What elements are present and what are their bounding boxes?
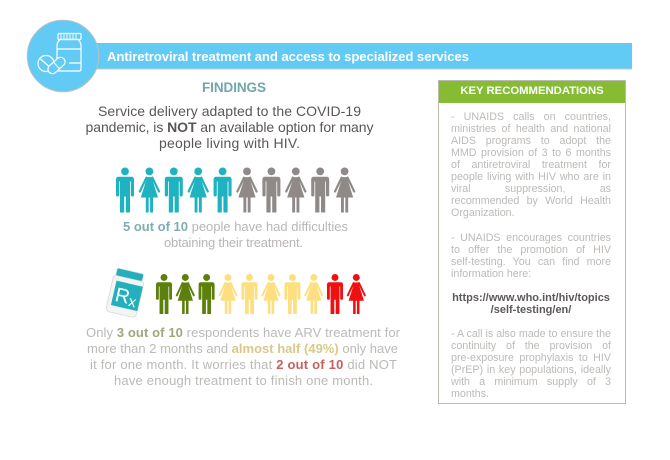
recommendation: PrEP continuity <box>451 328 611 400</box>
icon: medicine bottle and pills <box>27 20 99 92</box>
recommendation: HIV self-testing: to offer the promotion of HIV <box>451 244 611 256</box>
icon: Rx bottle: x <box>127 293 138 312</box>
recommendation: HIV self-testing: - UNAIDS encourages countries <box>451 232 611 244</box>
caption: ARV treatment duration: it for one month. It worries that 2 out of 10 did NOT <box>90 357 397 372</box>
link: WHO self-testing page: /self-testing/en/ <box>491 304 571 316</box>
title banner <box>90 43 632 70</box>
caption: 5 out of 10: obtaining their treatment. <box>164 235 303 250</box>
recommendation: multi-month dispensing: ministries of health and national <box>451 123 611 135</box>
recommendation: multi-month dispensing: - UNAIDS calls on countries, <box>451 111 611 123</box>
panel heading <box>439 81 625 103</box>
pictogram: treatment duration of 10 people <box>156 274 365 314</box>
caption: ARV treatment duration: have enough treatment to finish one month. <box>114 373 373 388</box>
recommendation: multi-month dispensing: Organization. <box>451 207 515 219</box>
panel: key recommendations <box>438 80 626 404</box>
icon: Rx bottle: R <box>113 284 132 309</box>
recommendation: HIV self-testing: information here: <box>451 268 531 280</box>
intro statement: people living with HIV. <box>159 135 300 151</box>
recommendation: PrEP continuity: continuity of the provision of <box>451 340 611 352</box>
recommendation: PrEP continuity: with a minimum supply of 3 <box>451 376 611 388</box>
intro statement: pandemic, is NOT an available option for many <box>86 119 374 135</box>
recommendation: multi-month dispensing: recommended by World Health <box>451 195 611 207</box>
recommendation: multi-month dispensing: viral suppression, as <box>451 183 611 195</box>
icon: Rx bottle <box>105 268 146 318</box>
heading: findings: FINDINGS <box>202 80 266 95</box>
caption: ARV treatment duration: more than 2 months and almost half (49%) only have <box>87 341 398 356</box>
recommendation: multi-month dispensing: people living with HIV who are in <box>451 171 611 183</box>
intro statement: Service delivery adapted to the COVID-19 <box>98 103 361 119</box>
caption: 5 out of 10: 5 out of 10 people have had difficulties <box>123 219 348 234</box>
recommendation: multi-month dispensing: of antiretroviral treatment for <box>451 159 611 171</box>
banner title text: Antiretroviral treatment and access to specialized services <box>107 49 469 64</box>
recommendation: multi-month dispensing <box>451 111 611 219</box>
intro statement <box>86 103 374 151</box>
recommendation: PrEP continuity: - A call is also made to ensure the <box>451 328 611 340</box>
pictogram: 5 of 10 people <box>116 168 354 212</box>
recommendation: PrEP continuity: months. <box>451 388 489 400</box>
recommendation: PrEP continuity: (PrEP) in key populations, ideally <box>451 364 611 376</box>
caption: ARV treatment duration: Only 3 out of 10 respondents have ARV treatment for <box>86 325 401 340</box>
link: WHO self-testing page: https://www.who.int/hiv/topics <box>452 292 610 304</box>
link: WHO self-testing page <box>452 292 610 316</box>
recommendation: multi-month dispensing: AIDS programs to adopt the <box>451 135 611 147</box>
recommendation: multi-month dispensing: MMD provision of 3 to 6 months <box>451 147 611 159</box>
recommendation: PrEP continuity: pre-exposure prophylaxis to HIV <box>451 352 611 364</box>
recommendation: HIV self-testing <box>451 232 611 280</box>
recommendation: HIV self-testing: self-testing. You can find more <box>451 256 611 268</box>
panel heading: KEY RECOMMENDATIONS <box>460 85 604 97</box>
caption: ARV treatment duration <box>86 325 401 388</box>
caption: 5 out of 10 <box>123 219 348 250</box>
